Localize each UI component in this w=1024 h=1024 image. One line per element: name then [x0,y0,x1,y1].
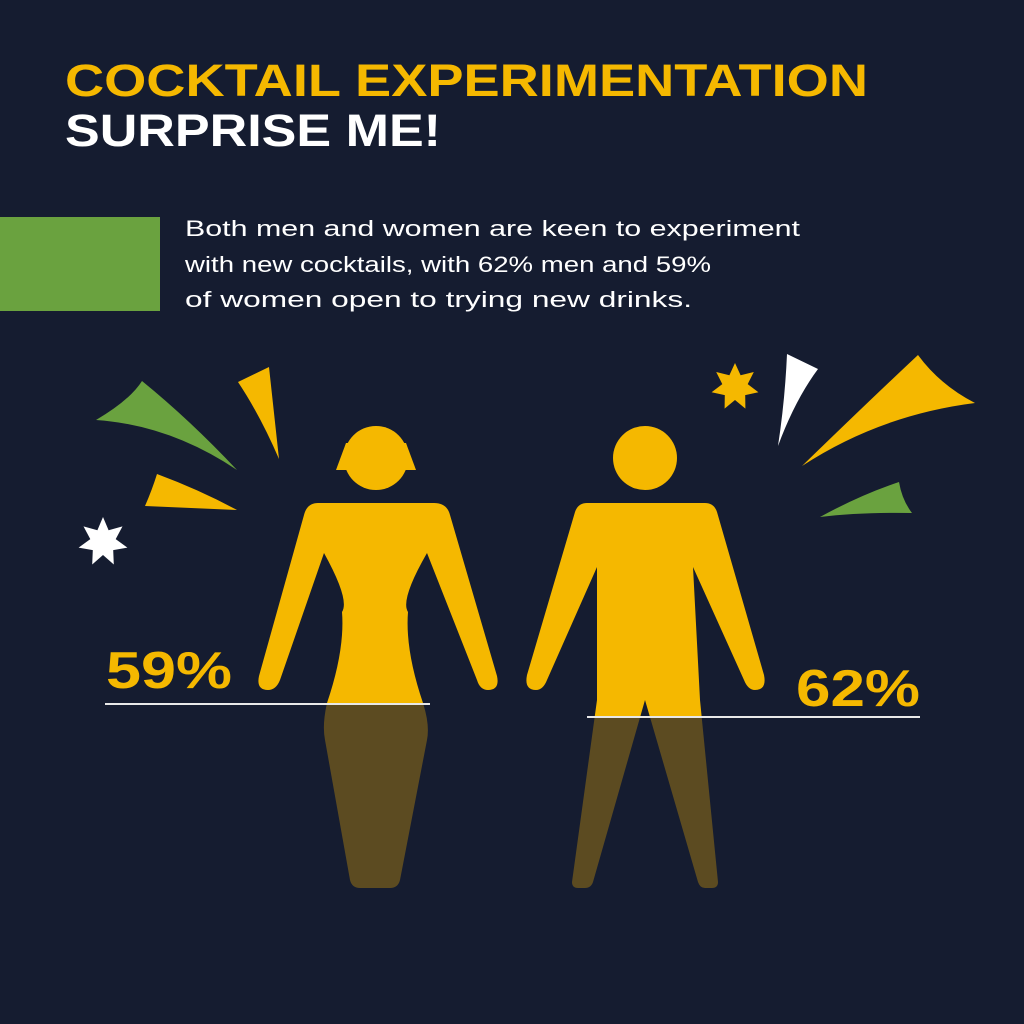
intro text: Both men and women are keen to experiment [185,216,800,241]
figure: man 62%: 62% [796,660,920,718]
decorations right [712,354,975,517]
intro text: with new cocktails, with 62% men and 59% [184,252,711,277]
green accent bar [0,217,160,311]
title: SURPRISE ME! [65,105,441,156]
decorations left [79,367,279,564]
figure: woman 59%: 59% [106,642,232,700]
figure: woman 59% [105,426,498,888]
intro text: of women open to trying new drinks. [185,287,692,312]
figure: man 62% [526,426,920,888]
title: COCKTAIL EXPERIMENTATION [65,55,868,106]
intro text [184,216,800,312]
title [65,55,868,156]
